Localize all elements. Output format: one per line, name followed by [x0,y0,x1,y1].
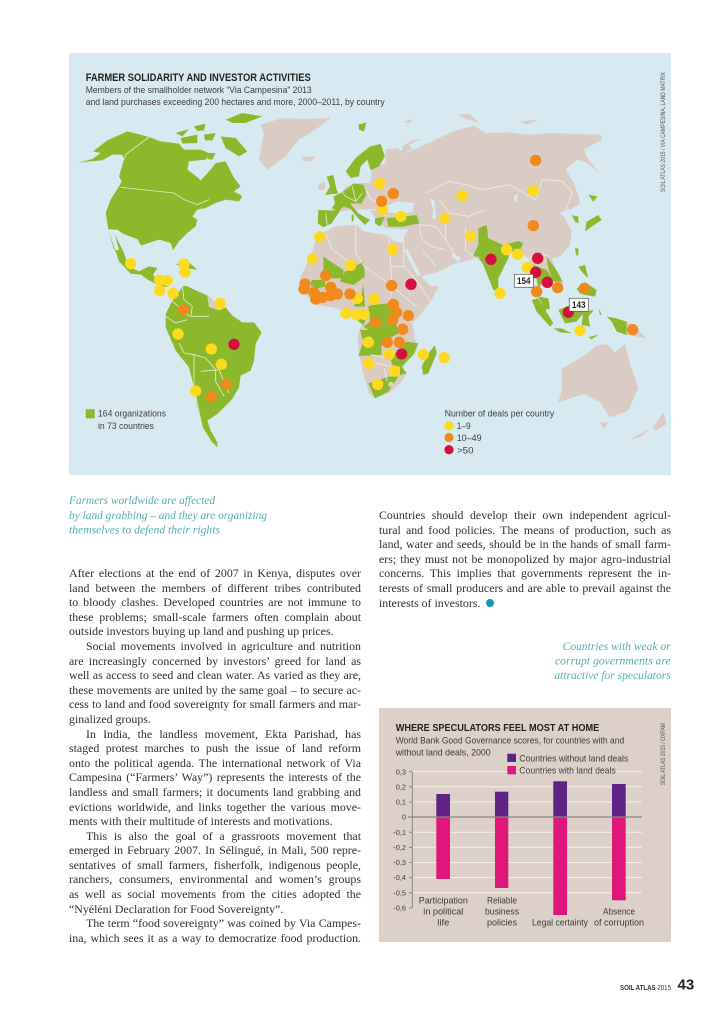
yellow dots: 1-9 deals [125,178,586,397]
caption: countries with weak governments [554,641,671,682]
y axis: 0,1 [396,798,406,807]
body text: left column: ina, which sees it as a way to democratize food production. [69,931,361,945]
chart source note: SOIL ATLAS 2015 / OXFAM [661,723,667,785]
body text: left column: as well as social movements from the cities adopted the [69,887,361,901]
body text: left column: ments with their multitude of interests and motivations. [69,814,333,828]
y axis: -0,5 [393,888,406,897]
body text: left column: “Nyéléni Declaration for Food Sovereignty”. [69,902,283,916]
footer: running title and page number [620,976,694,994]
map subtitle: and land purchases exceeding 200 hectares and more, 2000–2011, by country [86,96,385,107]
body text: left column: these movements are united by the same goal – to secure ac- [69,683,361,697]
legend: deals per country: 10–49 [457,432,482,443]
land without members [207,114,667,439]
category labels: of corruption [594,917,644,927]
body text: left column: are increasingly concerned by investors’ greed for land as [69,654,361,668]
body text: right column: tural and food policies. The means of production, such as [379,523,671,537]
body text: left column: Social movements involved in agriculture and nutrition [86,639,361,653]
body text: left column: The term “food sovereignty” was coined by Via Campes- [86,916,361,930]
country borders [108,137,572,441]
body text: left column: In India, the landless movement, Ekta Parishad, has [86,727,361,741]
red dots: more than 50 deals [228,253,574,360]
chart legend [507,752,629,775]
body text: right column: land, water and seeds, should be in the hands of small farm- [379,537,671,551]
y axis: 0,3 [396,767,406,776]
y axis: -0,1 [393,828,406,837]
legend: deals per country: >50 [457,444,474,455]
body text: left column: After elections at the end of 2007 in Kenya, disputes over [69,566,361,580]
lesotho [388,382,394,387]
caption: countries with weak governments: Countries with weak or [563,641,671,653]
category labels: policies [487,917,517,927]
body text: left column: well as access to seed and clean water. As varied as they are, [69,668,361,682]
legend: deals per country [444,408,554,455]
panel: speculators bar chart [379,708,671,942]
body text: right column: ers; they must not be monopolized by major agro-industrial [379,552,671,566]
member countries [77,113,627,447]
body text: left column: staged protest marches to push the issue of land reform [69,741,361,755]
caption: countries with weak governments: corrupt governments are [555,656,671,668]
footer: running title and page number: 43 [678,976,694,994]
y axis: -0,4 [393,873,406,882]
body text: left column: ranchers, consumers, environmental and women’s groups [69,872,361,886]
map: land [77,113,667,447]
chart legend: Countries without land deals [519,752,629,763]
body text: left column: cess to land and food sovereignty for small farmers and mar- [69,697,361,711]
body text: right column [379,508,671,610]
callout: 143 [569,298,588,311]
category labels: Legal certainty [532,917,588,927]
callout: 143: 143 [572,300,586,310]
chart subtitle: World Bank Good Governance scores, for countries with and [396,735,624,746]
body text: left column: these problems; small-scale farmers often complain about [69,610,361,624]
body text: left column: outside investors buying up land and pushing up prices. [69,624,334,638]
bars: countries with land deals [436,817,626,915]
category labels [419,895,644,927]
legend: organizations [86,408,166,431]
y axis: 0 [402,813,406,822]
category labels: Reliable [487,895,517,905]
bars: countries without land deals [436,781,626,817]
body text: left column: emerged in February 2007. In Sélingué, in Mali, 500 repre- [69,843,361,857]
body text: right column: terests of small producers and are able to prevail against the [379,581,671,595]
map title: FARMER SOLIDARITY AND INVESTOR ACTIVITIES [86,72,311,84]
callout: 154: 154 [517,276,530,286]
body text: left column [69,566,361,945]
caption: farmers [68,495,267,536]
map subtitle: Members of the smallholder network “Via Campesina” 2013 [86,84,312,95]
body text: left column: onto the political agenda. The international network of Via [69,756,361,770]
body text: right column: interests of investors. [379,596,480,610]
category labels: Participation [419,895,468,905]
category labels: Absence [603,906,635,916]
body text: left column: evictions worldwide, and links together the various move- [69,800,361,814]
body text: left column: land between the members of different tribes contributed [69,581,361,595]
category labels: life [437,917,449,927]
body text: right column: concerns. This implies that governments represent the in- [379,566,671,580]
caption: farmers: themselves to defend their rights [69,524,221,536]
body text: right column: Countries should develop their own independent agricul- [379,508,671,522]
body text: left column: sentatives of small farmers, fisherfolk, indigenous people, [69,858,361,872]
legend: deals per country: Number of deals per country [445,408,554,419]
footer: running title and page number: SOIL ATLAS 2015 [620,985,671,992]
inland seas [387,194,569,276]
y axis: 0,2 [396,782,406,791]
panel: world map [69,53,671,475]
y axis: -0,3 [393,858,406,867]
legend: deals per country: 1–9 [457,420,471,431]
caption: farmers: Farmers worldwide are affected [68,495,215,507]
chart subtitle [395,735,624,758]
end-of-article bullet [486,599,494,607]
body text: left column: ginalized groups. [69,712,151,726]
caption: farmers: by land grabbing – and they are organizing [69,510,267,522]
caption: countries with weak governments: attractive for speculators [554,670,671,682]
y axis [393,767,642,913]
orange dots: 10-49 deals [178,155,638,402]
map source note: SOIL ATLAS 2015 / VIA CAMPESINA, LAND MATRIX [661,72,667,192]
body text: left column: This is also the goal of a grassroots movement that [86,829,361,843]
chart subtitle: without land deals, 2000 [395,747,491,758]
body text: left column: to bloody clashes. Developed countries are not immune to [69,595,361,609]
body text: left column: Campesina (“Farmers’ Way”) represents the interests of the [69,770,361,784]
map subtitle [86,84,385,107]
y axis: -0,2 [393,843,406,852]
chart legend: Countries with land deals [519,764,616,775]
legend: organizations: 164 organizations [98,408,166,419]
callout: 154 [514,274,533,287]
chart title: WHERE SPECULATORS FEEL MOST AT HOME [396,722,599,734]
legend: organizations: in 73 countries [98,420,154,431]
y axis: -0,6 [393,904,406,913]
deal dots [125,155,638,402]
category labels: business [485,906,519,916]
category labels: in political [423,906,463,916]
body text: left column: landless and small farmers; it documents land grabbing and [69,785,361,799]
